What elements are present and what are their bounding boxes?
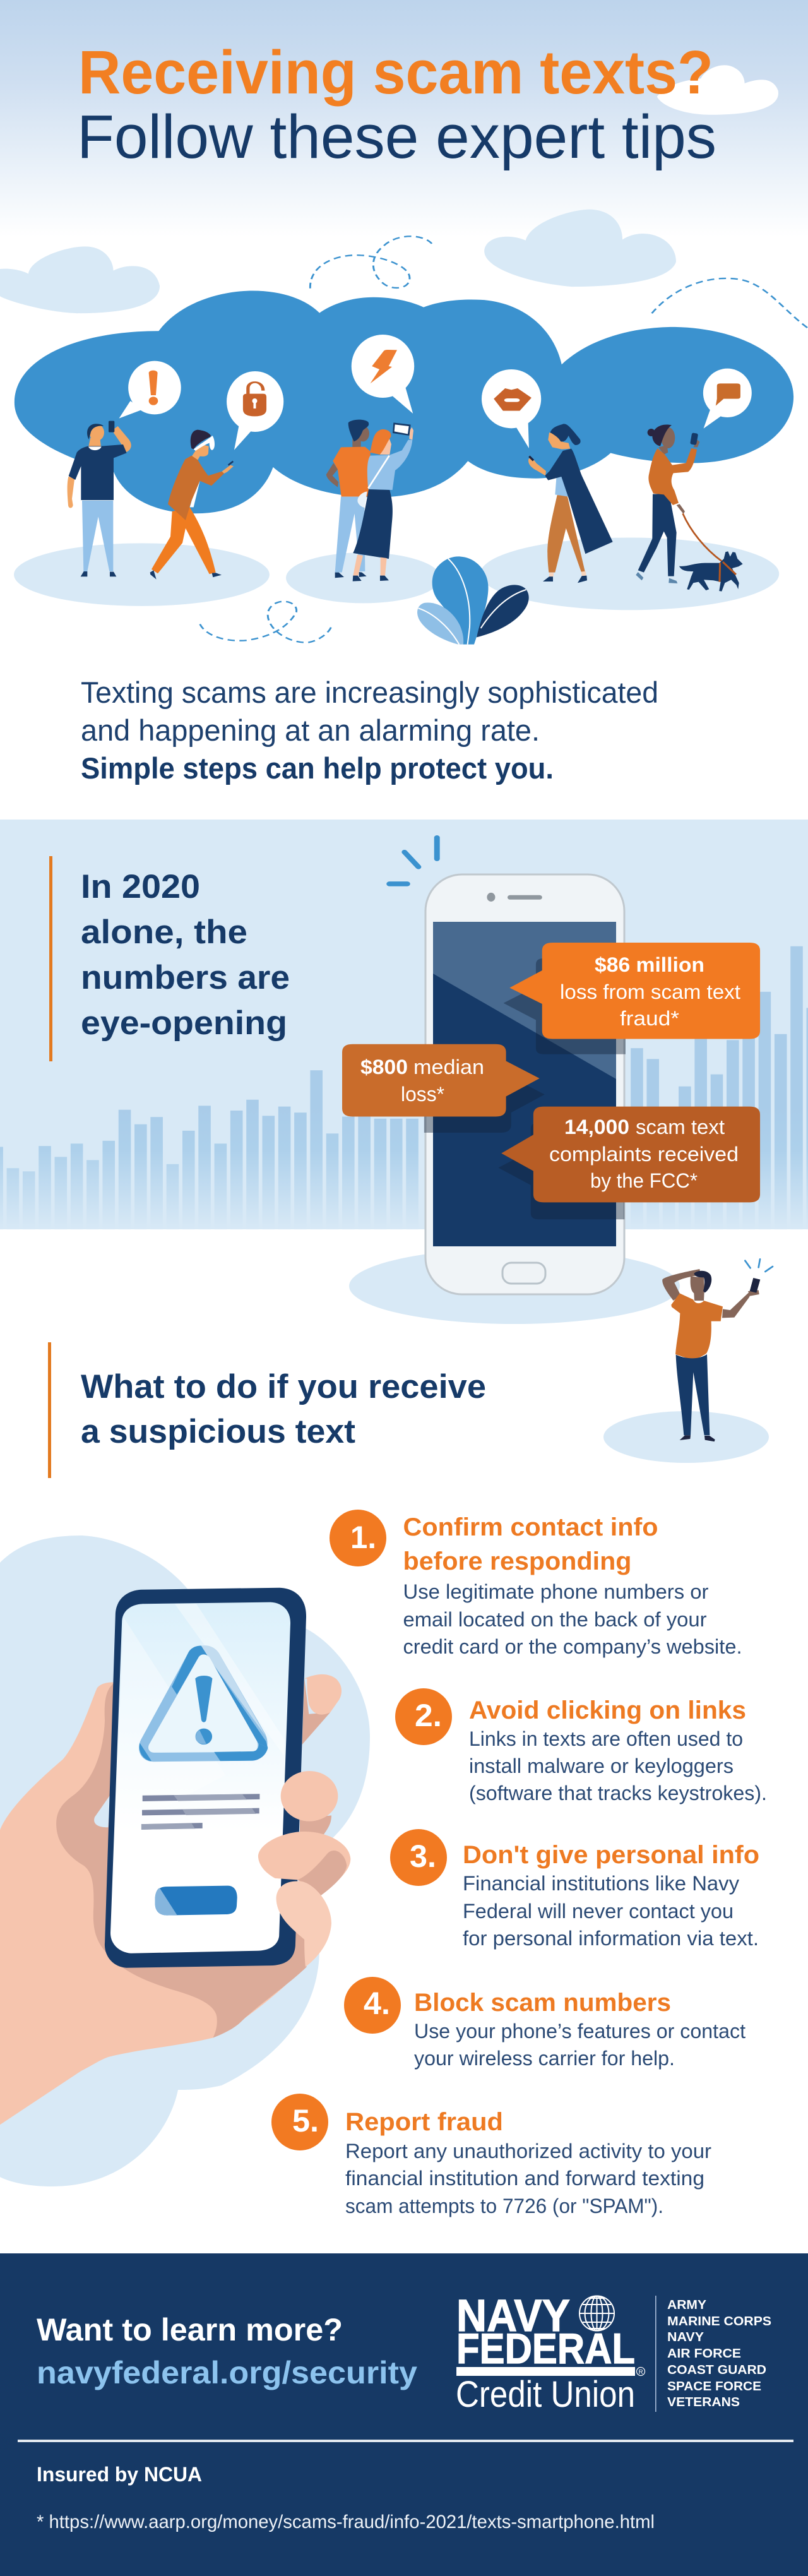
source footnote: * https://www.aarp.org/money/scams-fraud/info-2021/texts-smartphone.html: [37, 2512, 655, 2532]
logo: Navy Federal Credit Union: NAVY: [456, 2291, 570, 2341]
lips bubble: [482, 369, 541, 448]
title: [77, 38, 716, 171]
step 3: 3.: [410, 1839, 436, 1874]
dog on leash: [679, 513, 743, 592]
step 2: Links in texts are often used to: [469, 1727, 743, 1750]
dashed flight paths: [200, 236, 808, 643]
callout: 14,000 complaints: 14,000: [564, 1116, 629, 1138]
big blue cloud: [15, 290, 793, 513]
title: Follow these expert tips: [77, 102, 716, 171]
military branch list: ARMY: [667, 2298, 706, 2312]
military branch list: COAST GUARD: [667, 2363, 766, 2377]
person 1: man with phone: [68, 421, 131, 576]
registered mark: R: [639, 2369, 643, 2376]
step 1: Use legitimate phone numbers or: [403, 1580, 709, 1603]
callout: 14,000 complaints: complaints received: [549, 1143, 739, 1166]
accent bar: [49, 856, 52, 1061]
heading: In 2020: [81, 868, 290, 1042]
person looking at phone on ground ellipse: [603, 1259, 773, 1463]
intro text block: and happening at an alarming rate.: [81, 713, 540, 747]
step 1: 1.: [350, 1520, 376, 1555]
step 3: for personal information via text.: [463, 1927, 759, 1950]
step 5: Report fraud: [345, 2108, 503, 2136]
phone button: [155, 1886, 237, 1916]
callout: $86 million: fraud*: [620, 1007, 679, 1030]
illustration: hand holding phone with warning: [0, 1535, 370, 2186]
step 4: [344, 1977, 746, 2070]
callout: 14,000 complaints: [501, 1107, 760, 1202]
heading: In 2020: alone, the: [81, 914, 247, 951]
vertical divider: [655, 2296, 656, 2412]
intro text block: [81, 676, 658, 785]
chat bubble: [703, 369, 752, 429]
light background clouds: [0, 210, 676, 313]
lock bubble: [227, 371, 283, 450]
home button: [502, 1263, 545, 1284]
military branch list: VETERANS: [667, 2395, 740, 2409]
step 1: [330, 1510, 742, 1658]
registered mark: [636, 2368, 645, 2376]
call to action: navyfederal.org/security: [37, 2355, 417, 2390]
panel: footer: [0, 2253, 808, 2576]
logo: Navy Federal Credit Union: FEDERAL: [456, 2325, 635, 2373]
bubble shadows: [424, 958, 626, 1219]
illustration: people with speech bubbles on a blue cloud: [0, 210, 808, 645]
footer rule: [18, 2440, 793, 2442]
text placeholder lines: [141, 1794, 259, 1830]
step 4: your wireless carrier for help.: [414, 2047, 675, 2070]
plant: [417, 556, 529, 645]
step 1: credit card or the company’s website.: [403, 1635, 742, 1658]
call to action: [37, 2312, 417, 2390]
step 2: 2.: [415, 1698, 442, 1733]
heading: In 2020: In 2020: [81, 868, 200, 905]
person 2: walking woman with phone: [150, 430, 234, 580]
person 5, person 6 and dog: [528, 424, 743, 592]
logo: Navy Federal Credit Union: [456, 2291, 645, 2415]
step 1: before responding: [403, 1547, 631, 1575]
callout: $86 million: loss from scam text: [560, 981, 740, 1003]
step 5: [271, 2094, 711, 2217]
step 4: Use your phone’s features or contact: [414, 2020, 746, 2042]
step 3: Federal will never contact you: [463, 1900, 734, 1923]
step 1: email located on the back of your: [403, 1608, 707, 1631]
heading: In 2020: numbers are: [81, 959, 290, 996]
step 4: Block scam numbers: [414, 1989, 671, 2017]
step 2: Avoid clicking on links: [469, 1696, 746, 1724]
military branch list: NAVY: [667, 2330, 704, 2344]
lightning bubble: [352, 335, 414, 414]
step 5: scam attempts to 7726 (or "SPAM").: [345, 2195, 663, 2217]
speech bubble icons: [119, 335, 752, 450]
step 3: [390, 1829, 759, 1950]
step 2: [395, 1688, 767, 1804]
step 3: Financial institutions like Navy: [463, 1872, 739, 1895]
person 6: woman walking: [636, 424, 699, 583]
step 5: financial institution and forward texting: [345, 2167, 704, 2190]
ground ellipses: [14, 537, 779, 610]
military branch list: MARINE CORPS: [667, 2314, 771, 2329]
callout: $86 million: [509, 943, 760, 1039]
callout: $86 million: $86 million: [595, 953, 704, 976]
person 1 and person 2: [68, 421, 234, 580]
intro text block: Texting scams are increasingly sophisticated: [81, 676, 658, 709]
step 4: 4.: [364, 1986, 390, 2021]
heading: what to do: What to do if you receive: [81, 1368, 486, 1405]
speaker: [487, 893, 542, 902]
header sky background: [0, 0, 808, 237]
heading: what to do: a suspicious text: [81, 1413, 355, 1450]
military branch list: SPACE FORCE: [667, 2379, 761, 2394]
icon: globe: [579, 2296, 614, 2331]
step 3: Don't give personal info: [463, 1841, 759, 1869]
phone illustration: [425, 874, 624, 1294]
hand palm: [0, 1674, 342, 2125]
ellipse under phone: [349, 1248, 680, 1324]
warning triangle icon: [139, 1645, 268, 1762]
callout: $800 median loss: loss*: [401, 1083, 444, 1106]
icon: alert sparks: [389, 838, 437, 884]
step 2: (software that tracks keystrokes).: [469, 1782, 767, 1804]
fingers: [258, 1771, 350, 1967]
logo: Navy Federal Credit Union: Credit Union: [456, 2374, 635, 2415]
military branch list: [667, 2298, 771, 2409]
decorative white cloud behind title: [657, 65, 778, 115]
step 1: Confirm contact info: [403, 1513, 658, 1541]
band background: [0, 820, 808, 1229]
heading: In 2020: eye-opening: [81, 1005, 287, 1042]
phone body and screen: [105, 1588, 306, 1968]
title: Receiving scam texts?: [78, 38, 713, 107]
panel: statistics band: [0, 820, 808, 1229]
screen: [433, 922, 616, 1246]
blue blob: [0, 1535, 370, 2186]
persons 3 and 4: couple with tablet: [326, 420, 413, 581]
heading: what to do: [48, 1342, 486, 1478]
person 5: woman with cape: [528, 424, 613, 583]
military branch list: AIR FORCE: [667, 2346, 741, 2361]
callout: 14,000 complaints: by the FCC*: [590, 1169, 698, 1192]
alert bubble: [119, 361, 181, 419]
intro text block: Simple steps can help protect you.: [81, 751, 554, 785]
callout: $800 median loss: median: [413, 1056, 484, 1078]
insured note: Insured by NCUA: [37, 2463, 202, 2486]
callout: $800 median loss: $800: [360, 1056, 408, 1078]
step 2: install malware or keyloggers: [469, 1755, 734, 1777]
callout: $800 median loss: [342, 1044, 540, 1117]
call to action: Want to learn more?: [37, 2312, 343, 2347]
step 5: Report any unauthorized activity to your: [345, 2140, 711, 2162]
step 5: 5.: [292, 2103, 319, 2138]
background bar chart: [0, 946, 808, 1229]
callout: 14,000 complaints: scam text: [636, 1116, 725, 1138]
